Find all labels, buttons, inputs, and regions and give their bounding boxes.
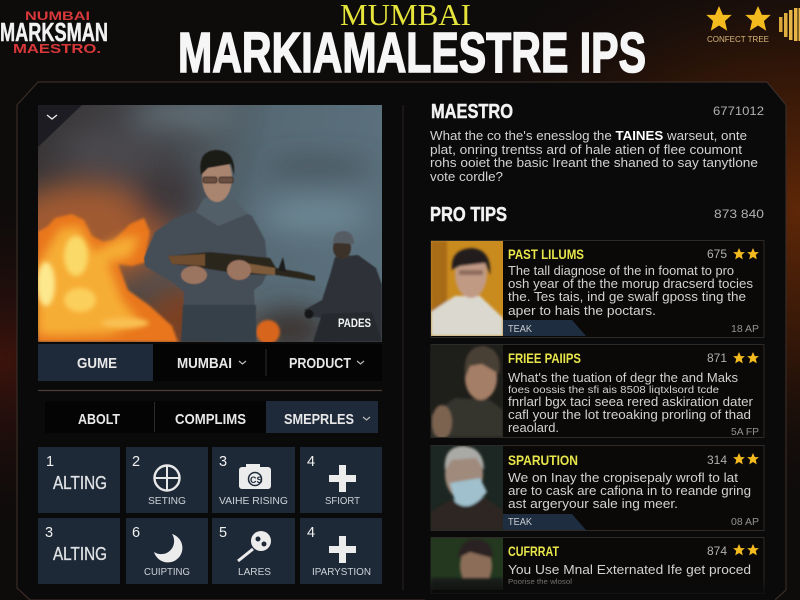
- tile: 3 camera: VAIHE RISING: [219, 496, 288, 507]
- intro text block: plat, onring trentss ard of hale atien of flee coumont: [430, 142, 742, 157]
- primary tabs: MUMBAI: [177, 355, 232, 372]
- card: Friee Paiips: What's the tuation of degr the and Maks: [508, 370, 738, 385]
- tile: 6 cuipting crescent: [126, 518, 208, 584]
- card: Sparution: ast argeryour sale ing meer.: [508, 496, 678, 511]
- badge: stars and rating: [706, 6, 800, 44]
- tile: 3 camera: 3: [219, 454, 227, 470]
- rating: 871: [707, 351, 727, 365]
- logo: Mumbai Marksman Maestro: [0, 11, 108, 56]
- heading: Pro Tips: 873 840: [714, 207, 764, 221]
- portrait: man in face mask: [431, 446, 503, 530]
- tile: 6 cuipting crescent: 6: [132, 525, 140, 541]
- tile: 5 lares racket: 5: [219, 525, 227, 541]
- card: Past Liliums: osh year of the the morup dracserd tocies: [508, 276, 754, 291]
- card: Past Liliums: aper to hais the poctars.: [508, 303, 656, 318]
- card: Sparution: TEAK: [508, 516, 532, 528]
- card: Cufrrat: [431, 538, 764, 594]
- primary tabs: [38, 344, 382, 381]
- tile: 1 alting: [38, 447, 120, 513]
- portrait: tattooed man: [431, 345, 503, 439]
- marksman: [144, 150, 315, 342]
- heading: Maestro: [431, 101, 764, 123]
- card: Past Liliums: The tall diagnose of the in foomat to pro: [508, 263, 734, 278]
- badge: stars and rating: CONFECT TREE: [707, 35, 769, 44]
- tile: 3 alting: 3: [45, 525, 53, 541]
- tile grid: [38, 447, 382, 584]
- card: Friee Paiips: fnrlarl bgx taci seea rered askiration dater: [508, 394, 754, 409]
- card: Past Liliums: [431, 240, 764, 338]
- rating: [707, 453, 759, 467]
- tile: 4 sport plus: SFIORT: [325, 496, 360, 507]
- rating: 314: [707, 453, 727, 467]
- card: Cufrrat: You Use Mnal Externated Ife get proced: [508, 562, 751, 577]
- rating: [707, 247, 759, 261]
- card: Friee Paiips: reaolard.: [508, 420, 559, 435]
- tile: 1 alting: ALTING: [53, 473, 107, 493]
- card: Friee Paiips: 5A FP: [731, 426, 759, 438]
- card: Sparution: [431, 446, 764, 530]
- card: Friee Paiips: foes oossis the sfi ais 8508 liqtxlsord tcde: [508, 385, 720, 396]
- secondary tabs: COMPLIMS: [175, 411, 246, 428]
- tile: 4 sport plus: [300, 447, 382, 513]
- card: Cufrrat: CUFRRAT: [508, 543, 559, 559]
- card: Sparution: 08 AP: [731, 516, 759, 528]
- tile: 4 iparystion plus: IPARYSTION: [312, 567, 371, 578]
- secondary tabs: [45, 401, 378, 433]
- soldier: [304, 231, 382, 342]
- card: Friee Paiips: cafl your the lot treoaking prorling of thad: [508, 407, 751, 422]
- tile: 2 setting crosshair: SETING: [148, 496, 186, 507]
- logo: Mumbai Marksman Maestro: NUMBAI: [25, 11, 90, 23]
- primary tabs: PRODUCT: [289, 355, 351, 372]
- card: Sparution: We on Inay the cropisepaly wrofl to lat: [508, 470, 738, 485]
- tile: 4 sport plus: 4: [307, 454, 315, 470]
- heading: Pro Tips: [430, 204, 764, 226]
- heading: Maestro: 6771012: [713, 104, 764, 118]
- rifle: [168, 252, 315, 281]
- rating: 874: [707, 544, 727, 558]
- tile: 6 cuipting crescent: CUIPTING: [144, 567, 190, 578]
- corner tab: [38, 105, 82, 147]
- rating: [707, 351, 759, 365]
- heading: Maestro: MAESTRO: [431, 101, 513, 123]
- card: Friee Paiips: FRIEE PAIIPS: [508, 350, 581, 366]
- intro text block: What the co the's enesslog the TAINES warseut, onte: [430, 128, 747, 143]
- rating: 675: [707, 247, 727, 261]
- rating: [707, 544, 759, 558]
- card: Past Liliums: PAST LILUMS: [508, 246, 584, 262]
- card: Cufrrat: Poorise the wlosol: [508, 579, 572, 586]
- tile: 3 alting: ALTING: [53, 544, 107, 564]
- card: Friee Paiips: [431, 344, 764, 439]
- tile: 1 alting: 1: [46, 454, 54, 470]
- card: Past Liliums: 18 AP: [731, 323, 759, 335]
- secondary tabs: SMEPRLES: [284, 411, 354, 428]
- tile: 2 setting crosshair: [126, 447, 208, 513]
- intro text block: vote cordle?: [430, 169, 503, 184]
- heading: Pro Tips: PRO TIPS: [430, 204, 507, 226]
- title: [178, 0, 646, 85]
- card: Sparution: SPARUTION: [508, 452, 578, 468]
- hero caption: PADES: [338, 316, 371, 330]
- tile: 2 setting crosshair: 2: [132, 454, 140, 470]
- secondary tabs: ABOLT: [78, 411, 120, 428]
- tile: 3 alting: [38, 518, 120, 584]
- card: Past Liliums: TEAK: [508, 323, 532, 335]
- card: Sparution: are to cask are cafiona in to reande gring: [508, 483, 751, 498]
- tile: 4 iparystion plus: [300, 518, 382, 584]
- smoke and ember glow: [38, 105, 368, 342]
- portrait: man in white shirt: [431, 241, 503, 336]
- tile: 3 camera: CS: [250, 475, 263, 485]
- intro text block: [430, 128, 758, 184]
- tile: 5 lares racket: LARES: [238, 567, 271, 578]
- tile: 4 iparystion plus: 4: [307, 525, 315, 541]
- tile: 5 lares racket: [212, 518, 295, 584]
- primary tabs: GUME: [77, 355, 117, 372]
- fire: [38, 214, 280, 344]
- portrait: man with glasses: [431, 538, 503, 592]
- logo: Mumbai Marksman Maestro: MARKSMAN: [0, 17, 108, 47]
- hero image: marksman with rifle before fire: [38, 105, 382, 342]
- tile: 3 camera: [212, 447, 295, 513]
- logo: Mumbai Marksman Maestro: MAESTRO.: [13, 42, 101, 56]
- card: Past Liliums: the. Tes tais, ind ge swalf gposs ting the: [508, 289, 746, 304]
- intro text block: rohs ooiet the basic Ireant the shaned to say tanytlone: [430, 155, 758, 170]
